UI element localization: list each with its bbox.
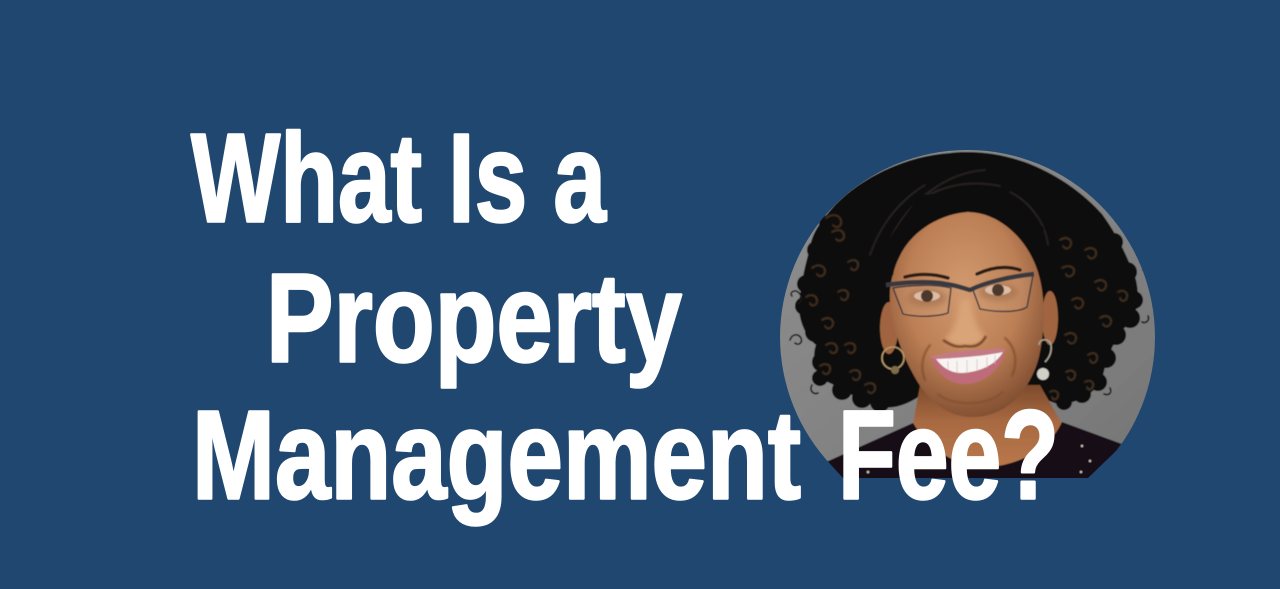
neck and chest [913,385,1062,467]
nose shading [945,300,984,346]
black top [826,422,1122,482]
eyes [914,284,1011,302]
curly hair mass [795,152,1143,412]
stray curl wisps [790,262,1149,395]
title [191,108,1059,526]
hoop earrings [882,340,1051,380]
cheek and nose-to-mouth shading [922,338,1015,403]
shirt studs [867,445,1091,473]
face [890,212,1044,417]
left and right ears [880,291,1058,354]
title line 2: Property [266,248,682,388]
eyebrows [905,267,1020,278]
title line 3 continued: Fee? [838,384,1059,526]
glasses [886,274,1034,316]
eye sockets [907,283,1018,307]
fringe hair over forehead [885,190,1044,276]
title line 3: Management [192,384,801,526]
smile [930,349,1006,384]
portrait backdrop [775,145,1160,485]
hair curl highlights [806,215,1127,400]
portrait of smiling woman with curly hair and glasses [775,145,1160,485]
hair sheen on crown [870,170,1048,255]
title line 1: What Is a [191,108,607,248]
